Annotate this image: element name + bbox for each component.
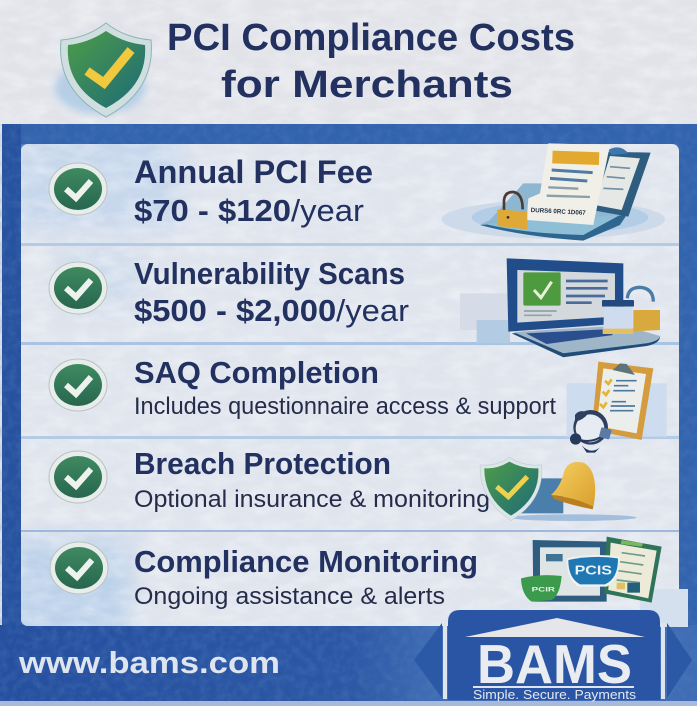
- heading: breach protection: Breach Protection: [134, 446, 391, 481]
- price: vulnerability scans: $500 - $2,000 /year: [134, 293, 409, 328]
- title: for Merchants: [221, 64, 513, 106]
- icon: check badge 4: [49, 451, 107, 503]
- heading: annual fee: Annual PCI Fee: [134, 154, 373, 190]
- row 5: compliance monitoring: [50, 542, 478, 610]
- website url: www.bams.com: [18, 645, 280, 680]
- illustration: laptop, document and padlock: [442, 143, 665, 241]
- illustration: laptop scan with padlock: [460, 258, 660, 357]
- header background: [0, 0, 697, 124]
- illustration: clipboard and support headset: [567, 362, 667, 453]
- wordmark: BAMS: [477, 633, 632, 695]
- tagline: Simple. Secure. Payments: [473, 687, 637, 702]
- icon: title shield: [54, 23, 151, 117]
- heading: vulnerability scans: Vulnerability Scans: [134, 256, 405, 291]
- description: SAQ completion: Includes questionnaire access & support: [134, 393, 556, 420]
- icon: check badge 2: [49, 262, 107, 314]
- illustration: PCI badges and clipboard: [521, 537, 662, 603]
- row 2: vulnerability scans: [49, 256, 409, 328]
- heading: compliance monitoring: Compliance Monitoring: [134, 544, 478, 579]
- illustration: PCI badges and clipboard: PCIR: [532, 587, 555, 594]
- description: breach protection: Optional insurance & monitoring: [134, 486, 490, 513]
- row 1: annual fee: [49, 154, 373, 228]
- title: [167, 17, 575, 106]
- illustration: PCI badges and clipboard: PCIS: [575, 563, 612, 577]
- icon: check badge 3: [49, 359, 107, 411]
- row 4: breach protection: [49, 446, 490, 513]
- illustration: laptop, document and padlock: DURS6 0RC 1D067: [531, 207, 586, 217]
- heading: SAQ completion: SAQ Completion: [134, 355, 379, 390]
- illustration: shield and alert bell: [480, 456, 637, 521]
- main panel: [10, 130, 688, 640]
- side arrows: [414, 623, 692, 698]
- icon: check badge 5: [50, 542, 108, 594]
- icon: check badge 1: [49, 163, 107, 215]
- description: compliance monitoring: Ongoing assistance & alerts: [134, 583, 445, 610]
- title: PCI Compliance Costs: [167, 17, 575, 59]
- row 3: SAQ completion: [49, 355, 556, 420]
- roof: [465, 618, 645, 637]
- BAMS logo: [414, 610, 692, 702]
- price: annual fee: $70 - $120 /year: [134, 193, 364, 228]
